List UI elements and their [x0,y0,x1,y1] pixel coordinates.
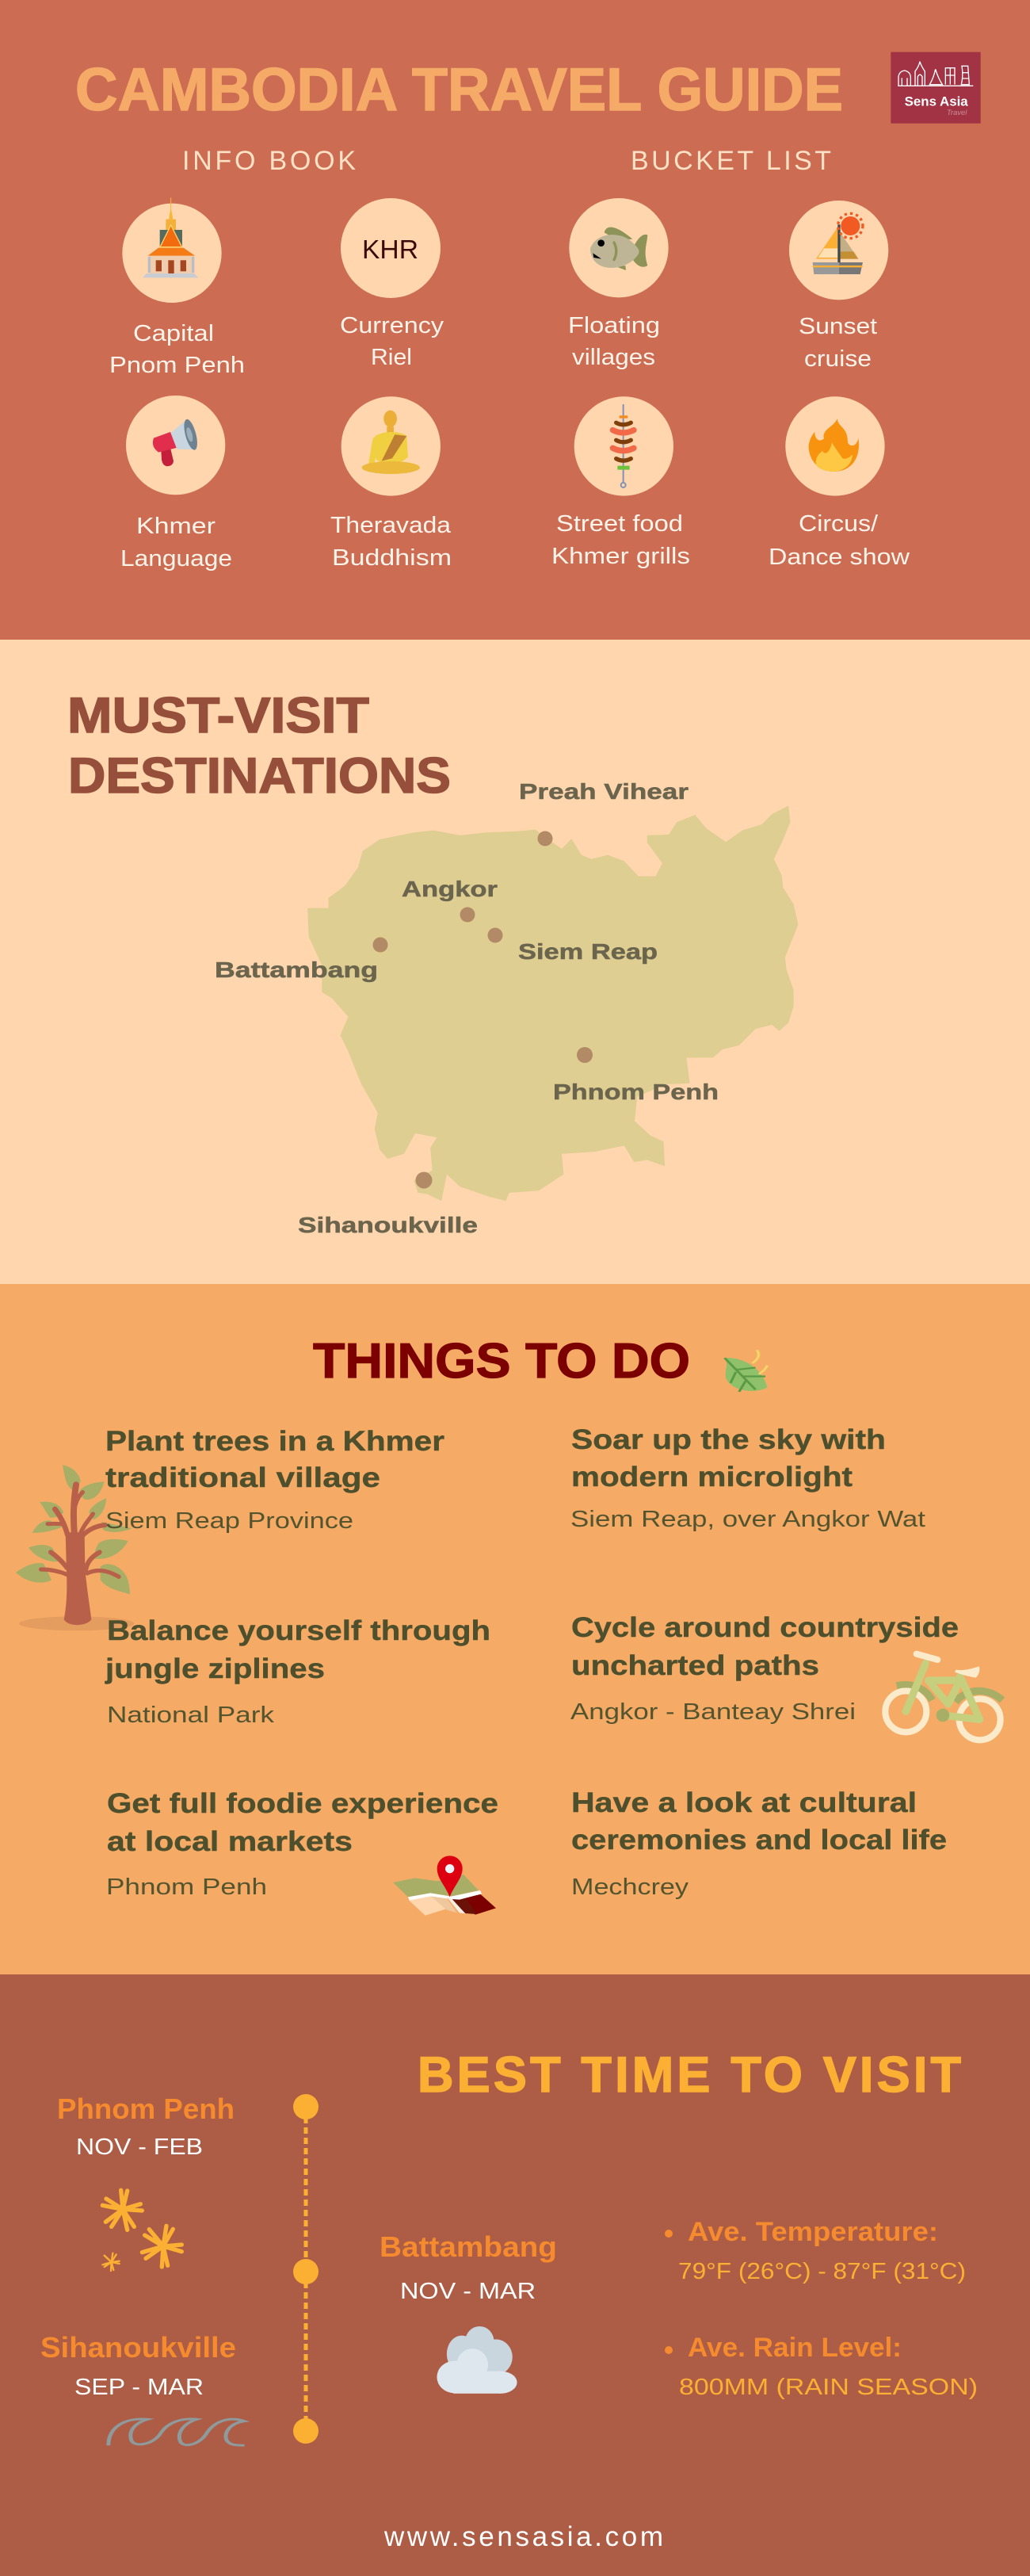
label: floating villages: villages [572,345,655,370]
marker: Preah Vihear [519,779,689,847]
season: Sihanoukville: SEP - MAR [74,2375,204,2400]
activity: food markets: at local markets [107,1826,353,1857]
heading: info book: INFO BOOK [182,146,356,176]
icon: sailboat at sunset [789,201,888,300]
label: currency [340,313,444,370]
logo: Sens Asia Travel: Travel [947,109,967,117]
stat: average rain level: Ave. Rain Level: [688,2333,902,2363]
marker: Preah Vihear: Preah Vihear [519,779,689,804]
label: street food: Khmer grills [551,544,690,569]
stat: average rain level: 800MM (RAIN SEASON) [679,2375,978,2400]
icon: megaphone [126,396,225,495]
icon: flowers [102,2190,181,2271]
label: floating villages: Floating [568,313,660,338]
activity: cultural ceremonies: Have a look at cultural [571,1787,917,1818]
label: sunset cruise: cruise [804,346,872,372]
icon: buddha [341,396,441,496]
activity: cycling: uncharted paths [571,1650,819,1681]
season: Battambang [380,2230,557,2304]
label: circus and dance show: Circus/ [799,511,879,537]
label: sunset cruise [799,314,877,372]
stat: average temperature: Ave. Temperature: [688,2217,938,2247]
icon: currency KHR [341,198,441,298]
activity: cycling: Angkor - Banteay Shrei [570,1699,856,1725]
marker: Phnom Penh [553,1047,719,1104]
label: religion [330,513,452,571]
icon: tree [16,1465,134,1630]
label: circus and dance show: Dance show [769,545,910,570]
logo: Sens Asia Travel: Sens Asia [905,94,968,109]
season: Battambang: Battambang [380,2230,557,2263]
label: language: Khmer [136,514,216,539]
stat: average temperature [665,2217,966,2284]
activity: ziplines: Balance yourself through [107,1615,490,1646]
marker: Battambang: Battambang [215,957,378,982]
logo: Sens Asia Travel [891,52,981,124]
heading: things to do: THINGS TO DO [313,1334,690,1389]
activity: cultural ceremonies [571,1787,947,1900]
activity: plant trees: traditional village [105,1462,380,1493]
activity: food markets [106,1788,498,1900]
icon: skewer [574,396,673,496]
label: sunset cruise: Sunset [799,314,877,339]
heading: best time to visit: BEST TIME TO VISIT [418,2047,961,2103]
label: circus and dance show [769,511,910,570]
label: capital [109,321,245,378]
marker: Angkor: Angkor [402,877,498,901]
marker: Sihanoukville [298,1171,478,1237]
activity: microlight: Siem Reap, over Angkor Wat [570,1507,925,1532]
label: language [120,514,232,571]
icon: waves [109,2419,244,2445]
panel: header info book and bucket list [0,0,1030,640]
season: Phnom Penh: Phnom Penh [57,2093,235,2125]
icon: capital temple [122,197,222,303]
heading: must-visit destinations [67,688,451,804]
activity: ziplines: National Park [107,1703,275,1728]
label: currency: Currency [340,313,444,338]
label: language: Language [120,546,232,571]
label: street food: Street food [556,511,683,537]
activity: food markets: Get full foodie experience [107,1788,498,1819]
label: currency: Riel [371,345,412,370]
panel: best time to visit [0,1974,1030,2576]
label: capital: Pnom Penh [109,353,245,378]
activity: microlight [570,1424,925,1532]
panel: things to do [0,1284,1030,1974]
activity: cultural ceremonies: ceremonies and local life [571,1825,947,1856]
marker: Sihanoukville: Sihanoukville [298,1213,478,1237]
marker: Phnom Penh: Phnom Penh [553,1080,719,1104]
activity: cultural ceremonies: Mechcrey [571,1875,689,1900]
season: Battambang: NOV - MAR [400,2279,536,2304]
marker: Siem Reap: Siem Reap [518,939,658,964]
heading: must-visit destinations: MUST-VISIT [67,688,369,743]
icon: flame [785,396,885,496]
stat: average rain level [665,2333,978,2400]
marker: Angkor [402,877,498,923]
website footer: www.sensasia.com [383,2521,663,2552]
panel: must-visit destinations [0,640,1030,1284]
activity: plant trees [105,1426,444,1534]
icon: cloud [437,2326,517,2394]
activity: cycling [570,1612,959,1725]
activity: microlight: modern microlight [571,1462,853,1492]
marker: Siem Reap [488,927,658,964]
map: Cambodia [307,806,798,1201]
timeline [293,2094,319,2444]
activity: ziplines: jungle ziplines [105,1653,325,1684]
stat: average temperature: 79°F (26°C) - 87°F (31°C) [678,2259,966,2284]
activity: plant trees: Siem Reap Province [105,1508,353,1534]
icon: bicycle [885,1654,1002,1740]
label: floating villages [568,313,660,370]
label: religion: Theravada [330,513,452,538]
season: Sihanoukville: Sihanoukville [40,2331,236,2364]
icon: map with pin [393,1856,496,1916]
marker: Battambang [215,937,388,982]
icon: leaf [725,1350,768,1392]
label: street food [551,511,690,569]
heading: bucket list: BUCKET LIST [631,146,831,176]
label: capital: Capital [133,321,214,346]
season: Sihanoukville [40,2331,236,2400]
activity: microlight: Soar up the sky with [571,1424,886,1455]
season: Phnom Penh [57,2093,235,2160]
activity: food markets: Phnom Penh [106,1875,267,1900]
icon: fish [569,198,669,297]
icon: currency KHR: KHR [362,235,418,264]
season: Phnom Penh: NOV - FEB [76,2135,203,2160]
label: religion: Buddhism [332,545,452,571]
title: CAMBODIA TRAVEL GUIDE [75,56,843,124]
heading: must-visit destinations: DESTINATIONS [68,748,451,804]
activity: plant trees: Plant trees in a Khmer [105,1426,444,1457]
activity: ziplines [105,1615,490,1728]
activity: cycling: Cycle around countryside [571,1612,959,1643]
